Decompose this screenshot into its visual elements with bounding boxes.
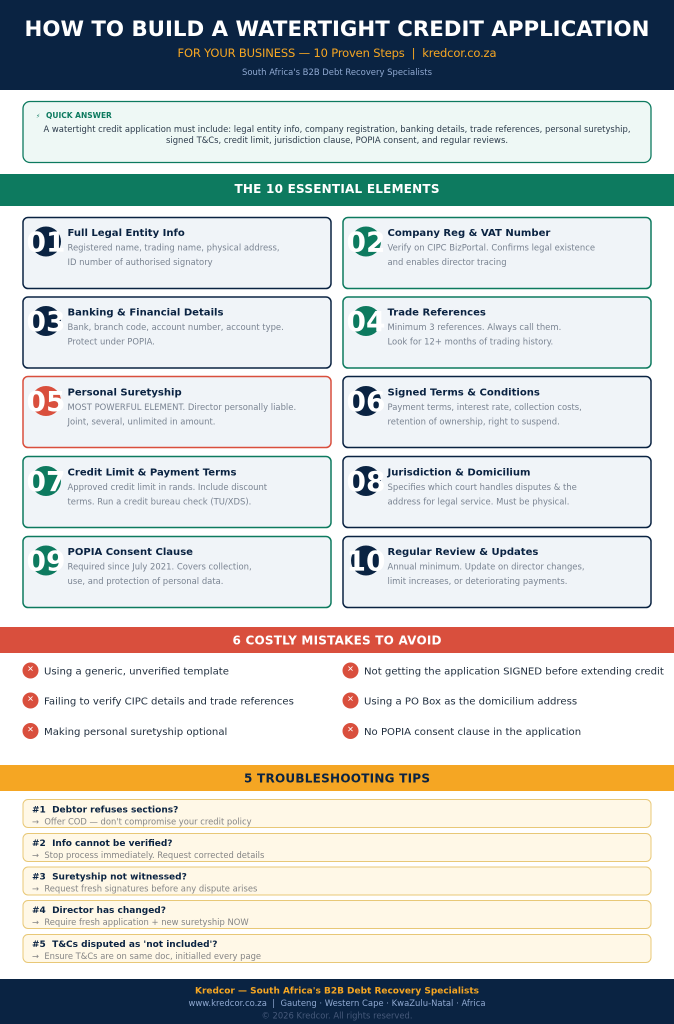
card 07: terms. Run a credit bureau check (TU/XDS). — [68, 496, 251, 506]
card 01: Full Legal Entity Info — [68, 228, 185, 239]
tip 5 — [23, 934, 651, 962]
card 09: Required since July 2021. Covers collection, — [68, 562, 252, 572]
tip 1: → Offer COD — don't compromise your credit policy — [32, 816, 252, 826]
mistake 6: ✕ — [347, 725, 354, 734]
card 08: address for legal service. Must be physical. — [388, 496, 569, 506]
card 07 — [23, 456, 331, 528]
tip 2: #2 Info cannot be verified? — [32, 839, 173, 849]
tagline: South Africa's B2B Debt Recovery Specialists — [242, 68, 432, 78]
card 01: Registered name, trading name, physical address, — [68, 242, 280, 252]
card 06: Payment terms, interest rate, collection costs, — [388, 402, 582, 412]
section heading: the 10 essential elements — [0, 174, 674, 206]
card 03: Bank, branch code, account number, account type. — [68, 322, 284, 332]
mistake 1: Using a generic, unverified template — [44, 666, 229, 678]
header banner — [0, 0, 674, 90]
card 02: Company Reg & VAT Number — [388, 228, 550, 239]
section heading: 5 troubleshooting tips — [0, 765, 674, 791]
card 04: Look for 12+ months of trading history. — [388, 336, 553, 346]
card 04: 04 — [347, 305, 385, 338]
card 06 — [343, 376, 651, 448]
card 08: 08 — [347, 465, 385, 498]
card 08: Jurisdiction & Domicilium — [386, 468, 530, 478]
tip 1 — [23, 800, 651, 828]
card 10 — [343, 536, 651, 608]
copyright: © 2026 Kredcor. All rights reserved. — [262, 1012, 412, 1022]
card 03: 03 — [27, 305, 65, 338]
quick answer text: A watertight credit application must include: legal entity info, company registration, banking details, trade references, personal suretyship, — [44, 125, 630, 135]
panel: quick answer: signed T&Cs, credit limit, jurisdiction clause, POPIA consent, and regular reviews. — [166, 136, 508, 146]
tip 2: → Stop process immediately. Request corrected details — [32, 850, 264, 860]
panel: quick answer — [23, 102, 651, 162]
mistake 3 — [22, 692, 294, 708]
tip 3 — [23, 867, 651, 895]
card 08: Specifies which court handles disputes & the — [388, 482, 577, 492]
card 02: and enables director tracing — [388, 257, 507, 267]
card 09: POPIA Consent Clause — [68, 547, 193, 558]
mistake 4: Using a PO Box as the domicilium address — [364, 696, 577, 708]
section heading: 6 costly mistakes: 6 COSTLY MISTAKES TO AVOID — [232, 634, 442, 648]
card 03: Protect under POPIA. — [68, 336, 155, 346]
mistake 2 — [342, 662, 664, 678]
card 06: retention of ownership, right to suspend. — [388, 416, 560, 426]
footer — [0, 979, 674, 1024]
card 04 — [343, 297, 651, 368]
mistake 6: No POPIA consent clause in the application — [364, 727, 581, 738]
card 04: Minimum 3 references. Always call them. — [388, 322, 561, 332]
footer brand line: Kredcor — South Africa's B2B Debt Recovery Specialists — [195, 986, 479, 996]
tip 5: #5 T&Cs disputed as 'not included'? — [32, 940, 218, 950]
mistake 5: Making personal suretyship optional — [44, 727, 227, 738]
mistake 2: ✕ — [347, 664, 354, 674]
card 03 — [23, 297, 331, 368]
card 07: 07 — [27, 465, 65, 498]
card 05 — [23, 376, 331, 448]
card 02: Verify on CIPC BizPortal. Confirms legal existence — [388, 242, 595, 252]
card 09 — [23, 536, 331, 608]
subtitle: FOR YOUR BUSINESS — 10 Proven Steps | kredcor.co.za — [178, 46, 496, 60]
card 02: 02 — [347, 226, 385, 258]
card 09: 09 — [27, 544, 65, 578]
tip 5: → Ensure T&Cs are on same doc, initialled every page — [32, 951, 261, 961]
mistake 3: ✕ — [27, 694, 34, 704]
card 07: Credit Limit & Payment Terms — [68, 468, 237, 478]
card 08 — [343, 456, 651, 528]
card 10: 10 — [347, 544, 385, 578]
card 01 — [23, 218, 331, 288]
card 10: Annual minimum. Update on director changes, — [388, 562, 585, 572]
quick answer label: QUICK ANSWER — [46, 111, 112, 120]
tip 1: #1 Debtor refuses sections? — [32, 806, 178, 816]
card 04: Trade References — [388, 308, 486, 318]
mistake 1: ✕ — [27, 664, 34, 674]
mistake 3: Failing to verify CIPC details and trade references — [44, 696, 294, 708]
mistake 6 — [342, 723, 581, 739]
section heading: 6 costly mistakes — [0, 627, 674, 653]
card 06: 06 — [347, 385, 385, 418]
card 02 — [343, 218, 651, 288]
card 01: 01 — [27, 226, 65, 258]
tip 4: #4 Director has changed? — [32, 906, 166, 916]
title: HOW TO BUILD A WATERTIGHT CREDIT APPLICATION — [24, 17, 650, 42]
quick answer label: ⚡ — [36, 113, 40, 120]
section heading: the 10 essential elements: THE 10 ESSENTIAL ELEMENTS — [234, 182, 440, 196]
mistake 1 — [22, 662, 229, 678]
card 01: ID number of authorised signatory — [68, 257, 213, 267]
card 06: Signed Terms & Conditions — [388, 388, 540, 398]
footer locations line: www.kredcor.co.za | Gauteng · Western Cape · KwaZulu-Natal · Africa — [188, 999, 486, 1009]
card 10: Regular Review & Updates — [388, 547, 538, 558]
tip 4 — [23, 900, 651, 928]
mistake 5 — [22, 723, 227, 739]
card 05: Joint, several, unlimited in amount. — [66, 416, 215, 426]
tip 4: → Require fresh application + new suretyship NOW — [32, 917, 249, 927]
section heading: 5 troubleshooting tips: 5 TROUBLESHOOTING TIPS — [244, 772, 430, 786]
card 07: Approved credit limit in rands. Include discount — [68, 482, 268, 492]
card 05: MOST POWERFUL ELEMENT. Director personally liable. — [68, 402, 296, 412]
card 10: limit increases, or deteriorating payments. — [388, 576, 567, 586]
tip 3: #3 Suretyship not witnessed? — [32, 872, 187, 882]
tip 2 — [23, 834, 651, 862]
mistake 4: ✕ — [347, 694, 354, 704]
mistake 4 — [342, 692, 577, 708]
mistake 2: Not getting the application SIGNED before extending credit — [364, 666, 664, 678]
card 03: Banking & Financial Details — [68, 308, 223, 318]
card 09: use, and protection of personal data. — [68, 576, 223, 586]
mistake 5: ✕ — [27, 725, 34, 734]
card 05: Personal Suretyship — [68, 388, 182, 398]
tip 3: → Request fresh signatures before any dispute arises — [32, 884, 257, 894]
card 05: 05 — [27, 385, 65, 418]
